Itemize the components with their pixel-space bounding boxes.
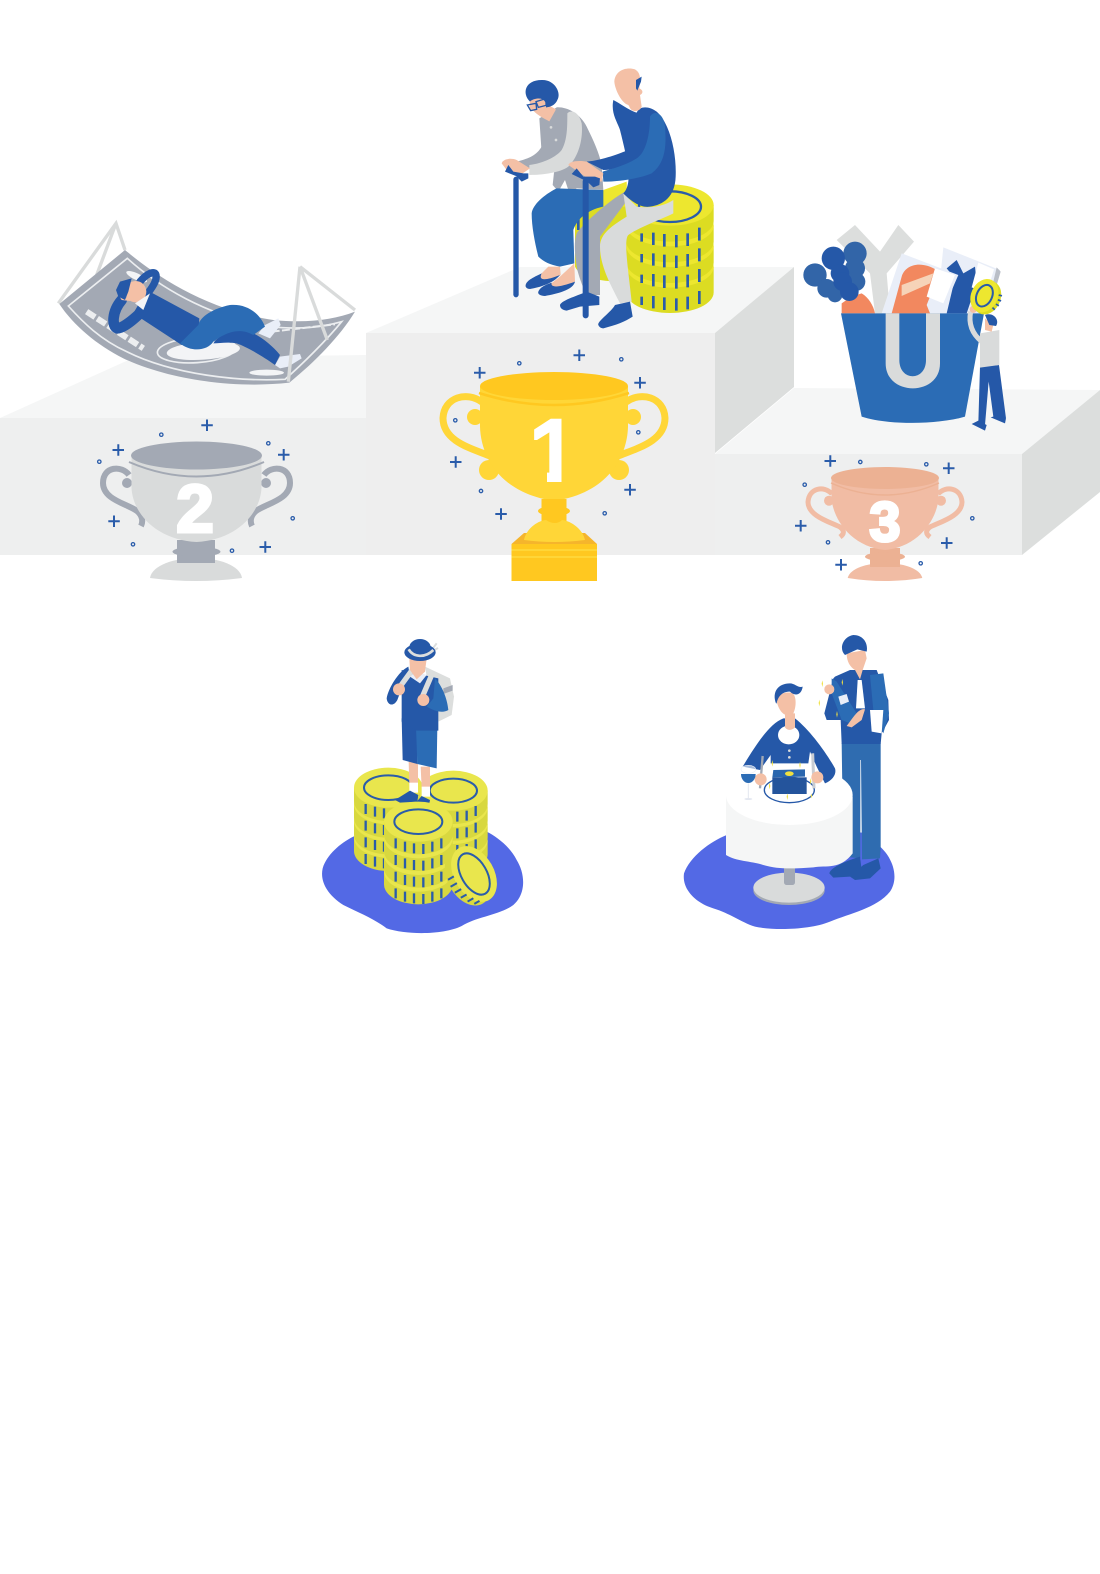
bottle shape: [837, 225, 914, 313]
hiker: [387, 639, 454, 813]
infographic canvas: [0, 68, 1100, 934]
sparkles: [98, 350, 974, 570]
place setting with treasure box: [741, 753, 823, 803]
trophy 3: bronze: [808, 467, 962, 581]
right coin stack: [419, 771, 488, 874]
illustration: shopping bag and person with coin: [803, 225, 1007, 431]
numeral 1: 1: [529, 401, 580, 503]
podium: [0, 267, 1100, 555]
coin: [965, 274, 1007, 319]
fish package: [937, 247, 1001, 313]
back coin stack: [575, 182, 627, 282]
waiter: [824, 635, 889, 880]
trophy 1: gold: [443, 372, 665, 581]
front coin stack: [626, 184, 714, 313]
blue blob: [322, 807, 523, 933]
banknote hammock: [59, 250, 355, 385]
meat package: [882, 253, 958, 313]
lying man: [114, 273, 302, 368]
illustration: elderly couple on coins: [502, 68, 714, 328]
trophy 2: silver: [103, 442, 290, 581]
illustration: diners at restaurant table: [684, 635, 894, 929]
blue blob: [684, 827, 894, 929]
woman: [502, 80, 603, 297]
table: [726, 765, 853, 905]
sparkles: [769, 679, 843, 800]
right hammock support: [288, 267, 355, 382]
seated diner: [743, 683, 835, 783]
front coin stack: [384, 802, 453, 904]
illustration: man in banknote hammock: [58, 223, 355, 385]
person lifting coin: [965, 274, 1007, 431]
numeral 2: 2: [176, 471, 214, 547]
man: [560, 68, 676, 328]
numeral 3: 3: [869, 490, 901, 553]
shopping bag: [841, 313, 984, 423]
illustration: hiker on coin stacks: [322, 639, 523, 933]
left coin stack: [354, 768, 423, 871]
left hammock support: [58, 223, 125, 303]
carrot with leaves: [803, 242, 875, 313]
tilted coin: [435, 838, 506, 914]
